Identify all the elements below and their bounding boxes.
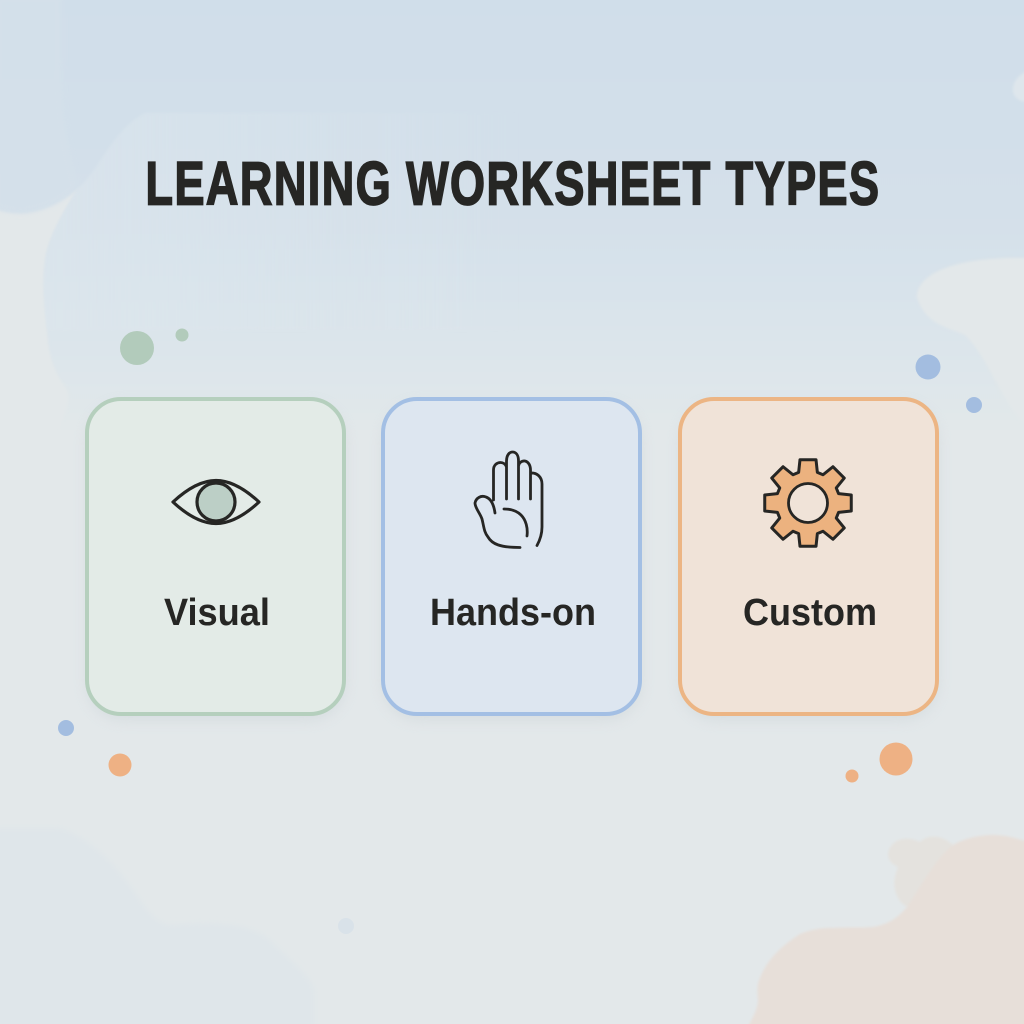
card: hands-on	[383, 399, 640, 714]
label: custom: Custom	[743, 592, 877, 634]
label: hands-on: Hands-on	[430, 592, 596, 634]
decorative dots: top left	[120, 328, 188, 365]
icon: gear	[765, 460, 851, 546]
panel: visual	[87, 399, 345, 720]
faint dot	[338, 918, 354, 934]
panel: hands-on	[383, 399, 641, 720]
icon: hand	[475, 452, 542, 548]
decorative dots: bottom right	[846, 742, 912, 782]
icon: eye	[173, 480, 259, 524]
decorative dots: bottom left	[58, 720, 132, 776]
card: custom	[680, 399, 937, 714]
decorative dots: top right	[916, 354, 982, 413]
card: visual	[87, 399, 344, 714]
panel: custom	[680, 399, 938, 720]
label: visual: Visual	[164, 592, 270, 634]
